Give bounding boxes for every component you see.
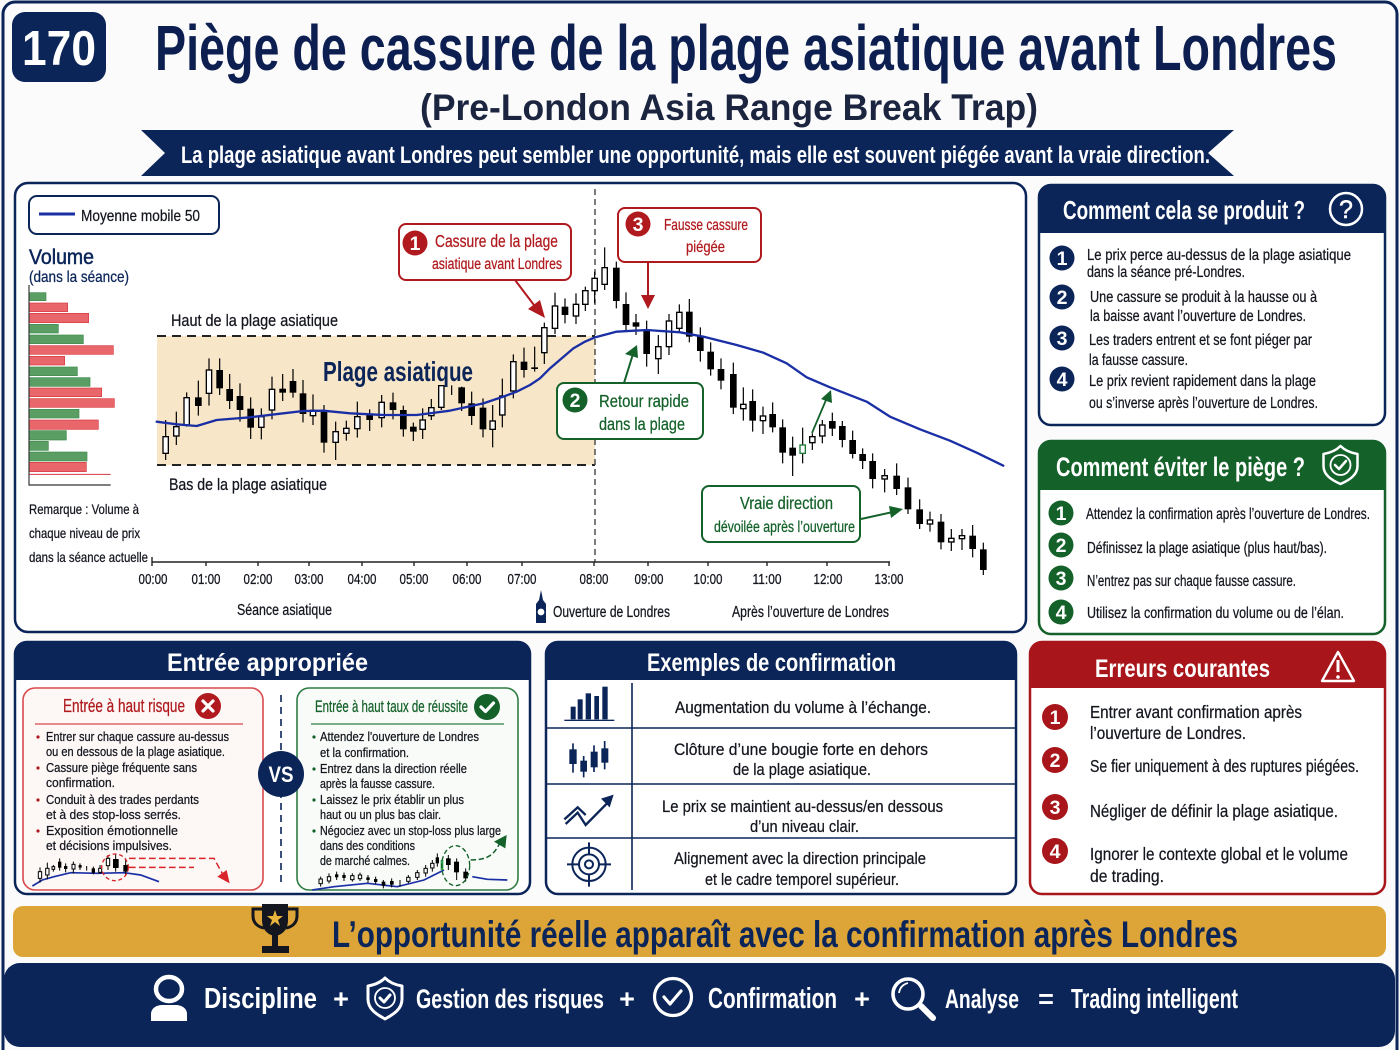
sub-panel: high success entry: de marché calmes.	[320, 853, 410, 868]
callout 3: false break: 3	[633, 214, 644, 236]
step 2: Une cassure se produit à la hausse ou à	[1090, 289, 1317, 306]
range high label: Haut de la plage asiatique	[171, 311, 338, 330]
time axis: 04:00	[348, 572, 376, 588]
icon: question mark	[1330, 193, 1362, 225]
callout 3: false break	[618, 208, 761, 262]
mistake 2	[1042, 747, 1359, 776]
sub-panel: high risk entry: Exposition émotionnelle	[46, 823, 178, 838]
sub-panel: high success entry: Attendez l'ouverture de Londres	[320, 729, 479, 744]
candlesticks	[163, 247, 987, 575]
volume heading: (dans la séance)	[29, 269, 129, 286]
moving average line	[157, 330, 1003, 466]
time axis: 06:00	[452, 572, 482, 588]
volume profile bars	[29, 285, 114, 485]
word: analysis: Analyse	[945, 984, 1019, 1014]
time axis: 09:00	[634, 572, 664, 588]
time axis: 01:00	[192, 572, 220, 588]
volume heading	[29, 246, 129, 286]
callout 4: true direction	[702, 486, 860, 542]
VS badge	[258, 751, 304, 797]
step 1: 1	[1057, 248, 1068, 270]
time axis: 05:00	[400, 572, 428, 588]
time axis: 12:00	[814, 572, 842, 588]
row 2 text	[674, 740, 928, 779]
sub-panel: high success entry: après la fausse cassure.	[320, 776, 435, 791]
sub-panel: high risk entry: confirmation.	[46, 775, 115, 790]
volume heading: Volume	[29, 246, 94, 269]
panel heading: Exemples de confirmation	[647, 649, 896, 677]
panel: how to avoid	[1039, 441, 1385, 634]
number badge	[12, 12, 106, 82]
arrow: pullback to average	[812, 390, 832, 433]
sub-panel: high success entry: haut ou un plus bas clair.	[320, 807, 441, 822]
panel heading: Comment cela se produit ?	[1063, 195, 1305, 225]
range name: Plage asiatique	[323, 356, 473, 387]
sub-panel: high success entry: Négociez avec un stop-loss plus large	[320, 823, 501, 838]
gold takeaway banner	[13, 904, 1386, 957]
mistake 3: Négliger de définir la plage asiatique.	[1090, 801, 1338, 821]
row 3 text: Le prix se maintient au-dessus/en dessous	[662, 797, 943, 816]
sub-panel: high risk entry: et décisions impulsives.	[46, 838, 172, 853]
step 1	[1050, 246, 1351, 281]
step 4: Le prix revient rapidement dans la plage	[1089, 373, 1316, 390]
time axis: 07:00	[508, 572, 536, 588]
mistake 4: 4	[1050, 841, 1061, 863]
step 1: dans la séance pré-Londres.	[1087, 264, 1245, 281]
time axis: 13:00	[874, 572, 904, 588]
icon: target	[567, 842, 611, 887]
item 2	[1048, 532, 1327, 558]
word: discipline: Discipline	[204, 983, 317, 1015]
panel: how it happens	[1039, 185, 1385, 425]
sub-panel: high risk entry: Conduit à des trades perdants	[46, 792, 199, 807]
panel heading: Erreurs courantes	[1095, 655, 1270, 683]
subtitle: (Pre-London Asia Range Break Trap)	[420, 87, 1038, 128]
mistake 3	[1042, 794, 1338, 821]
step 2	[1050, 284, 1317, 325]
sub-panel: high risk entry: Cassure piège fréquente sans	[46, 760, 197, 775]
time axis	[138, 557, 904, 588]
sub-panel: high success entry: dans des conditions	[320, 838, 415, 853]
sub-panel: high risk entry: et à des stop-loss serrés.	[46, 807, 181, 822]
item 4: Utilisez la confirmation du volume ou de l’élan.	[1087, 605, 1344, 622]
word: smart trading: Trading intelligent	[1071, 983, 1238, 1014]
divider: versus line	[280, 695, 282, 885]
mistake 4	[1042, 838, 1348, 886]
callout 2: fast return: 2	[570, 390, 581, 412]
icon: shield check	[368, 978, 402, 1019]
callout 4: true direction: Vraie direction	[740, 493, 833, 513]
item 2: 2	[1056, 535, 1067, 557]
row 4 text: Alignement avec la direction principale	[674, 849, 926, 868]
sub-panel: high risk entry: Entrer sur chaque cassure au-dessus	[46, 729, 229, 744]
equals sign: =	[1038, 984, 1054, 1014]
step 4: ou s’inverse après l’ouverture de Londres.	[1089, 395, 1318, 412]
panel: price chart	[15, 183, 1026, 632]
panel: appropriate entry	[15, 642, 530, 894]
step 1: Le prix perce au-dessus de la plage asiatique	[1087, 247, 1351, 264]
footer formula bar	[4, 963, 1395, 1047]
item 3: 3	[1056, 568, 1067, 590]
arrow: to break candle	[515, 280, 545, 318]
mistake 1: l’ouverture de Londres.	[1090, 723, 1246, 743]
callout 1: range break	[399, 224, 571, 280]
step 4: 4	[1057, 369, 1068, 391]
volume note	[29, 501, 148, 565]
mini chart: trap	[32, 854, 230, 886]
icon: rising arrow	[564, 795, 614, 825]
step 2: la baisse avant l’ouverture de Londres.	[1090, 308, 1306, 325]
item 3	[1048, 566, 1296, 590]
callout 1: range break: Cassure de la plage	[435, 231, 558, 251]
sub-panel: high risk entry	[23, 688, 263, 890]
time axis: 11:00	[752, 572, 782, 588]
mistake 1: 1	[1050, 707, 1061, 729]
step 3: Les traders entrent et se font piéger par	[1089, 332, 1312, 349]
legend: moving average	[29, 196, 219, 234]
word: confirmation: Confirmation	[708, 983, 837, 1015]
session label: asia: Séance asiatique	[237, 602, 332, 619]
callout 1: range break: asiatique avant Londres	[432, 256, 562, 273]
London open divider	[594, 189, 596, 562]
word: risk management: Gestion des risques	[416, 984, 604, 1014]
plus sign: +	[619, 984, 635, 1014]
callout 2: fast return	[557, 383, 703, 439]
row 2 text: de la plage asiatique.	[733, 760, 871, 779]
panel: confirmation examples	[546, 642, 1016, 894]
time axis: 00:00	[138, 572, 168, 588]
time axis: 10:00	[694, 572, 722, 588]
sub-panel: high success entry: et la confirmation.	[320, 745, 409, 760]
mistake 4: Ignorer le contexte global et le volume	[1090, 844, 1348, 864]
time axis: 02:00	[244, 572, 272, 588]
row 2 text: Clôture d’une bougie forte en dehors	[674, 740, 928, 759]
range low label: Bas de la plage asiatique	[169, 475, 327, 494]
icon: volume bars	[564, 687, 614, 721]
row 3 text: d’un niveau clair.	[750, 817, 859, 836]
panel heading: Entrée appropriée	[167, 649, 368, 677]
callout 2: fast return: dans la plage	[599, 414, 685, 434]
icon: magnifier	[893, 979, 933, 1018]
icon: warning	[1322, 652, 1354, 681]
icon: person	[151, 977, 187, 1021]
callout 3: false break: piégée	[686, 239, 725, 256]
panel: common mistakes	[1030, 642, 1385, 894]
ribbon banner	[141, 130, 1234, 176]
step 3: 3	[1057, 328, 1068, 350]
icon: check circle	[654, 978, 692, 1016]
callout 1: range break: 1	[410, 233, 421, 255]
item 4	[1048, 600, 1344, 624]
mistake 2: 2	[1050, 750, 1061, 772]
sub-panel: high success entry: Entrée à haut taux de réussite	[315, 697, 468, 716]
callout 2: fast return: Retour rapide	[599, 391, 689, 411]
row 3 text	[662, 797, 943, 836]
icon: Big Ben	[536, 590, 546, 623]
row 1 text: Augmentation du volume à l’échange.	[675, 698, 931, 717]
callout 4: true direction: dévoilée après l’ouverture	[714, 519, 855, 536]
sub-panel: high risk entry: ou en dessous de la plage asiatique.	[46, 744, 225, 759]
mistake 4: de trading.	[1090, 866, 1164, 886]
sub-panel: high success entry: Laissez le prix établir un plus	[320, 792, 464, 807]
sub-panel: high risk entry: Entrée à haut risque	[63, 696, 185, 716]
arrow: to false break	[641, 262, 655, 309]
icon: question mark: ?	[1339, 196, 1353, 224]
time axis: 08:00	[580, 572, 608, 588]
item 1	[1048, 500, 1370, 526]
item 3: N’entrez pas sur chaque fausse cassure.	[1087, 573, 1296, 590]
mistake 3: 3	[1050, 797, 1061, 819]
mistake 1	[1042, 702, 1302, 743]
step 3	[1050, 326, 1312, 369]
panel heading: Comment éviter le piège ?	[1056, 452, 1305, 482]
icon: shield	[1324, 446, 1358, 484]
callout 3: false break: Fausse cassure	[664, 217, 748, 234]
session label: after open: Après l’ouverture de Londres	[732, 604, 889, 621]
row 4 text	[674, 849, 926, 889]
row 4 text: et le cadre temporel supérieur.	[705, 870, 899, 889]
asian range zone	[157, 336, 595, 465]
sub-panel: high success entry: Entrez dans la direction réelle	[320, 761, 467, 776]
VS badge: VS	[268, 762, 294, 787]
step 2: 2	[1057, 287, 1068, 309]
icon: trophy	[253, 904, 297, 953]
session label: London open: Ouverture de Londres	[553, 604, 670, 621]
item 1: 1	[1056, 503, 1067, 525]
arrow: to range	[624, 345, 638, 383]
icon: candles	[569, 741, 608, 777]
step 4	[1050, 366, 1318, 412]
number badge: 170	[22, 22, 96, 76]
step 3: la fausse cassure.	[1089, 352, 1188, 369]
mistake 1: Entrer avant confirmation après	[1090, 702, 1302, 722]
item 4: 4	[1056, 602, 1067, 624]
plus sign: +	[854, 984, 870, 1014]
sub-panel: high success entry	[297, 688, 518, 890]
arrow: to true direction	[861, 506, 903, 519]
time axis: 03:00	[294, 572, 324, 588]
plus sign: +	[333, 984, 349, 1014]
volume note: Remarque : Volume à	[29, 501, 139, 517]
volume note: dans la séance actuelle	[29, 549, 148, 565]
mini chart: confirmation	[312, 835, 507, 890]
volume note: chaque niveau de prix	[29, 525, 140, 541]
legend: moving average: Moyenne mobile 50	[81, 208, 200, 225]
item 2: Définissez la plage asiatique (plus haut/bas).	[1087, 540, 1327, 557]
